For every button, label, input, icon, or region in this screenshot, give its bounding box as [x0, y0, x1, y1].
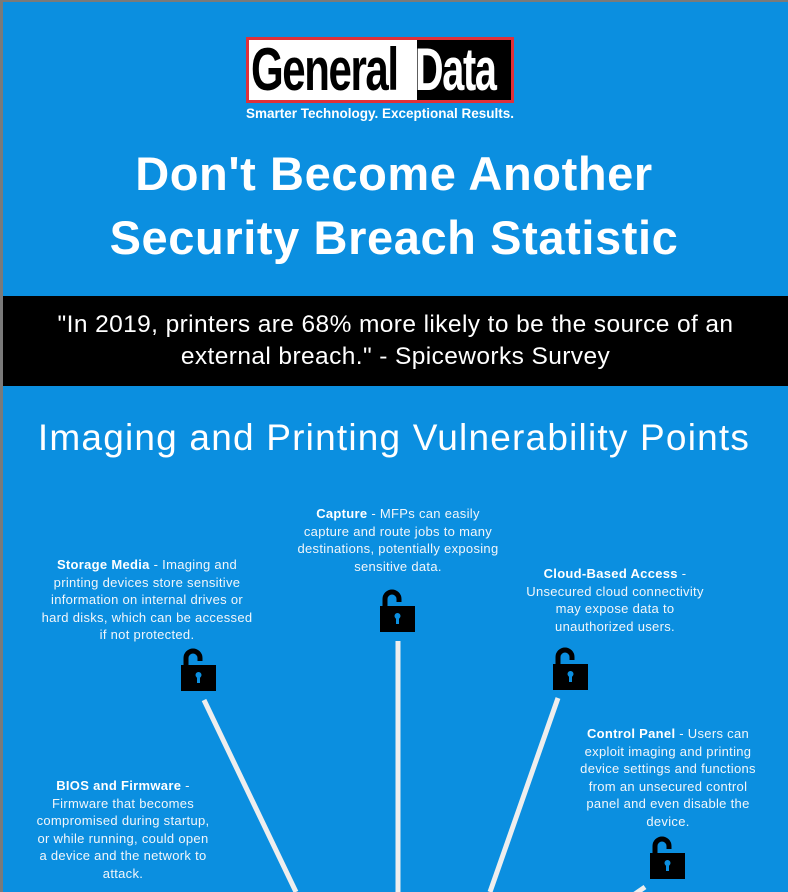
text: storage media: Storage Media - Imaging and: [57, 557, 237, 572]
text: capture: sensitive data.: [354, 558, 442, 574]
text: bios: [37, 778, 209, 880]
quote band: "In 2019, printers are 68% more likely to be the source of an: [58, 311, 733, 338]
text: bios: Firmware that becomes: [52, 796, 194, 810]
text: bios: BIOS and Firmware -: [56, 778, 190, 793]
text: capture: destinations, potentially exposing: [298, 541, 498, 556]
text: capture: [298, 506, 498, 574]
text: bios: a device and the network to: [39, 848, 207, 863]
text: cloud: [526, 566, 704, 634]
text: storage media: if not protected.: [100, 627, 194, 642]
text: storage media: [42, 557, 252, 642]
text: cloud: Unsecured cloud connectivity: [526, 584, 704, 598]
title: Security Breach Statistic: [110, 211, 678, 264]
text: control panel: device.: [646, 814, 690, 828]
text: bios: or while running, could open: [37, 830, 208, 846]
text: cloud: unauthorized users.: [555, 618, 675, 634]
text: capture: Capture - MFPs can easily: [316, 506, 480, 521]
text: control panel: device settings and functions: [580, 761, 756, 776]
text: bios: attack.: [103, 866, 143, 880]
icon: lock capture: [380, 592, 415, 632]
icon: lock storage: [181, 651, 216, 691]
tagline: Smarter Technology. Exceptional Results.: [246, 106, 514, 121]
text: control panel: panel and even disable the: [586, 796, 750, 811]
text: control panel: Control Panel - Users can: [587, 726, 749, 741]
title: Don't Become Another: [135, 147, 653, 200]
text: control panel: [580, 726, 756, 828]
icon: lock cloud: [553, 650, 588, 690]
text: cloud: may expose data to: [556, 601, 674, 616]
text: capture: capture and route jobs to many: [304, 524, 492, 538]
section heading: Imaging and Printing Vulnerability Points: [38, 417, 750, 458]
text: control panel: from an unsecured control: [589, 778, 747, 794]
text: bios: compromised during startup,: [37, 813, 209, 828]
title: [110, 147, 678, 264]
text: storage media: information on internal drives or: [51, 592, 243, 607]
quote band: [3, 296, 788, 386]
text: storage media: hard disks, which can be accessed: [42, 610, 252, 624]
icon: lock control panel: [650, 839, 685, 879]
quote band: external breach." - Spiceworks Survey: [181, 343, 610, 370]
text: cloud: Cloud-Based Access -: [544, 566, 686, 581]
text: storage media: printing devices store sensitive: [54, 574, 240, 590]
text: control panel: exploit imaging and printing: [585, 744, 751, 758]
logo: [246, 37, 514, 103]
